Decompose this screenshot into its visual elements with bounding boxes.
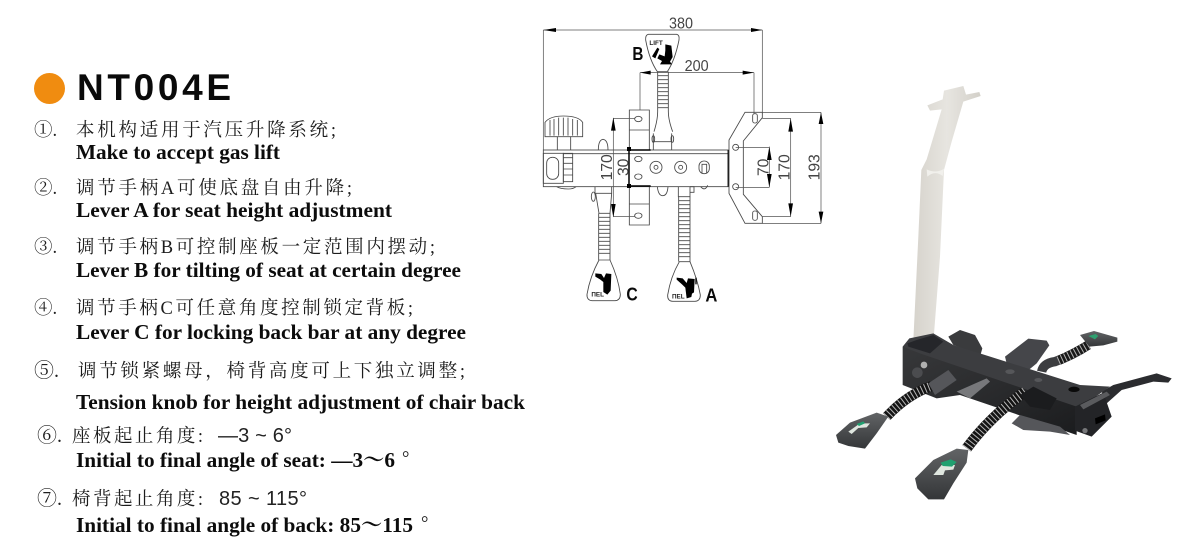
label A: A: [705, 285, 717, 306]
feature 2: ②.: [34, 178, 57, 199]
feature 2: 调节手柄A可使底盘自由升降;: [76, 177, 352, 199]
left lever: [836, 370, 957, 449]
main mounting bar: [543, 139, 728, 196]
dimensions 170 and 30: 170: [599, 154, 616, 180]
feature 7: [37, 487, 428, 537]
feature list: [34, 120, 525, 537]
feature 1: 本机构适用于汽压升降系统;: [76, 120, 336, 141]
dimensions 170 and 30: [599, 117, 635, 217]
rear mid tab: [1005, 339, 1049, 372]
rear lever: [1042, 331, 1117, 372]
right mounting bracket: [729, 112, 762, 223]
left mounting brackets: [627, 110, 728, 225]
feature 7: 椅背起止角度:: [72, 489, 203, 510]
feature 1: Make to accept gas lift: [76, 140, 280, 164]
knob behind body: [948, 330, 982, 357]
feature 4: Lever C for locking back bar at any degree: [76, 320, 466, 344]
dimension 200: 200: [685, 58, 709, 75]
feature 6: —3 ~ 6°: [218, 425, 292, 447]
feature 4: [34, 297, 466, 344]
feature 7: Initial to final angle of back: 85～115: [76, 513, 413, 537]
feature 5: [34, 359, 525, 414]
feature 3: 调节手柄B可控制座板一定范围内摆动;: [76, 236, 435, 258]
feature 5: Tension knob for height adjustment of chair back: [76, 390, 525, 414]
label B: B: [632, 43, 643, 64]
mechanism body: [903, 333, 1110, 435]
dimension 200: [640, 58, 754, 113]
icon: lift lever B: LIFT: [649, 40, 663, 47]
feature 3: ③.: [34, 237, 57, 258]
lower pivot bracket: [1012, 415, 1070, 435]
feature 1: [34, 120, 336, 164]
front lever: [915, 387, 1057, 499]
feature 3: Lever B for tilting of seat at certain degree: [76, 258, 461, 282]
tension knob: [545, 116, 583, 150]
dimensions 70, 170 and 193: 170: [777, 154, 794, 180]
feature 6: °: [402, 449, 409, 469]
feature 3: [34, 236, 461, 282]
feature 4: 调节手柄C可任意角度控制锁定背板;: [76, 297, 413, 319]
label C: C: [626, 284, 638, 305]
feature 6: Initial to final angle of seat: —3～6: [76, 448, 395, 472]
dimensions 70, 170 and 193: 70: [756, 158, 773, 176]
dimensions 70, 170 and 193: 193: [807, 154, 824, 180]
technical drawing with dimensions: [543, 16, 824, 306]
dimensions 70, 170 and 193: [736, 112, 824, 223]
dimension 380: 380: [669, 16, 693, 33]
lever C: [587, 187, 620, 301]
back bar: [913, 86, 981, 343]
feature 7: 85 ~ 115°: [219, 488, 307, 510]
right arm plate: [1102, 373, 1172, 403]
feature 5: ⑤.: [34, 359, 59, 382]
feature 5: 调节锁紧螺母，椅背高度可上下独立调整;: [78, 360, 465, 382]
feature 7: °: [421, 514, 428, 534]
title: NT004E with orange bullet: NT004E: [77, 67, 231, 108]
feature 6: [37, 424, 409, 472]
lever A: [668, 185, 708, 301]
dimensions 170 and 30: 30: [616, 158, 633, 176]
icon: lever A: ПEL: [672, 293, 685, 300]
product photo: chair mechanism: [836, 86, 1172, 499]
feature 6: 座板起止角度:: [72, 426, 203, 447]
feature 6: ⑥.: [37, 424, 62, 447]
feature 1: ①.: [34, 120, 57, 141]
feature 2: Lever A for seat height adjustment: [76, 198, 392, 222]
feature 4: ④.: [34, 298, 57, 319]
right end bracket: [1075, 392, 1112, 437]
lever B: [646, 34, 679, 150]
dimension 380: [543, 16, 762, 150]
feature 7: ⑦.: [37, 487, 62, 510]
feature 2: [34, 177, 392, 222]
icon: lever C: ПEL: [591, 292, 604, 299]
